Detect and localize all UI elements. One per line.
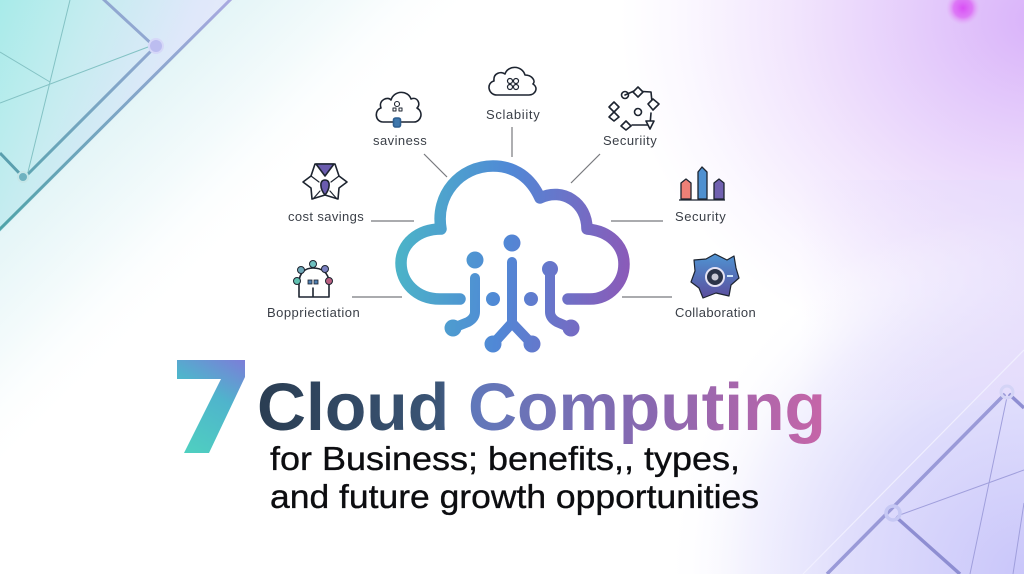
icon: arch of nodes (294, 260, 332, 297)
item: securiity (603, 87, 659, 148)
label: scalability: Sclabiity (486, 107, 540, 122)
icon: cloud (489, 67, 536, 95)
icon: gear star badge (691, 254, 739, 298)
icon: star with pin (303, 164, 347, 199)
connector lines (352, 127, 672, 297)
decoration: bottom-right wireframe (803, 350, 1024, 574)
item: cost savings (288, 164, 364, 224)
item: scalability (486, 67, 540, 122)
numeral 7 (177, 360, 245, 453)
circuit nodes (444, 234, 580, 352)
label: collaboration: Collaboration (675, 305, 756, 320)
icon: cloud with shield (376, 92, 421, 127)
circuit left (453, 278, 475, 328)
label: security: Security (675, 209, 726, 224)
item: bopprieciation (267, 260, 360, 320)
label: cost savings: cost savings (288, 209, 364, 224)
label: securiity: Securiity (603, 133, 657, 148)
circuit right (550, 269, 571, 328)
label: saviness: saviness (373, 133, 427, 148)
circuit middle (493, 262, 532, 344)
decoration: top-left wireframe (0, 0, 232, 231)
subtitle (270, 440, 759, 515)
central cloud icon (401, 166, 624, 352)
subtitle line 1: for Business; benefits,, types, (270, 440, 740, 477)
item: collaboration (675, 254, 756, 320)
item: saviness (373, 92, 427, 148)
icon: bar chart (679, 167, 725, 200)
cloud outline (401, 166, 624, 299)
item: security (675, 167, 726, 224)
label: bopprieciation: Boppriectiation (267, 305, 360, 320)
title: Cloud Computing (257, 370, 826, 445)
icon: network of diamonds (609, 87, 659, 130)
subtitle line 2: and future growth opportunities (270, 478, 759, 515)
